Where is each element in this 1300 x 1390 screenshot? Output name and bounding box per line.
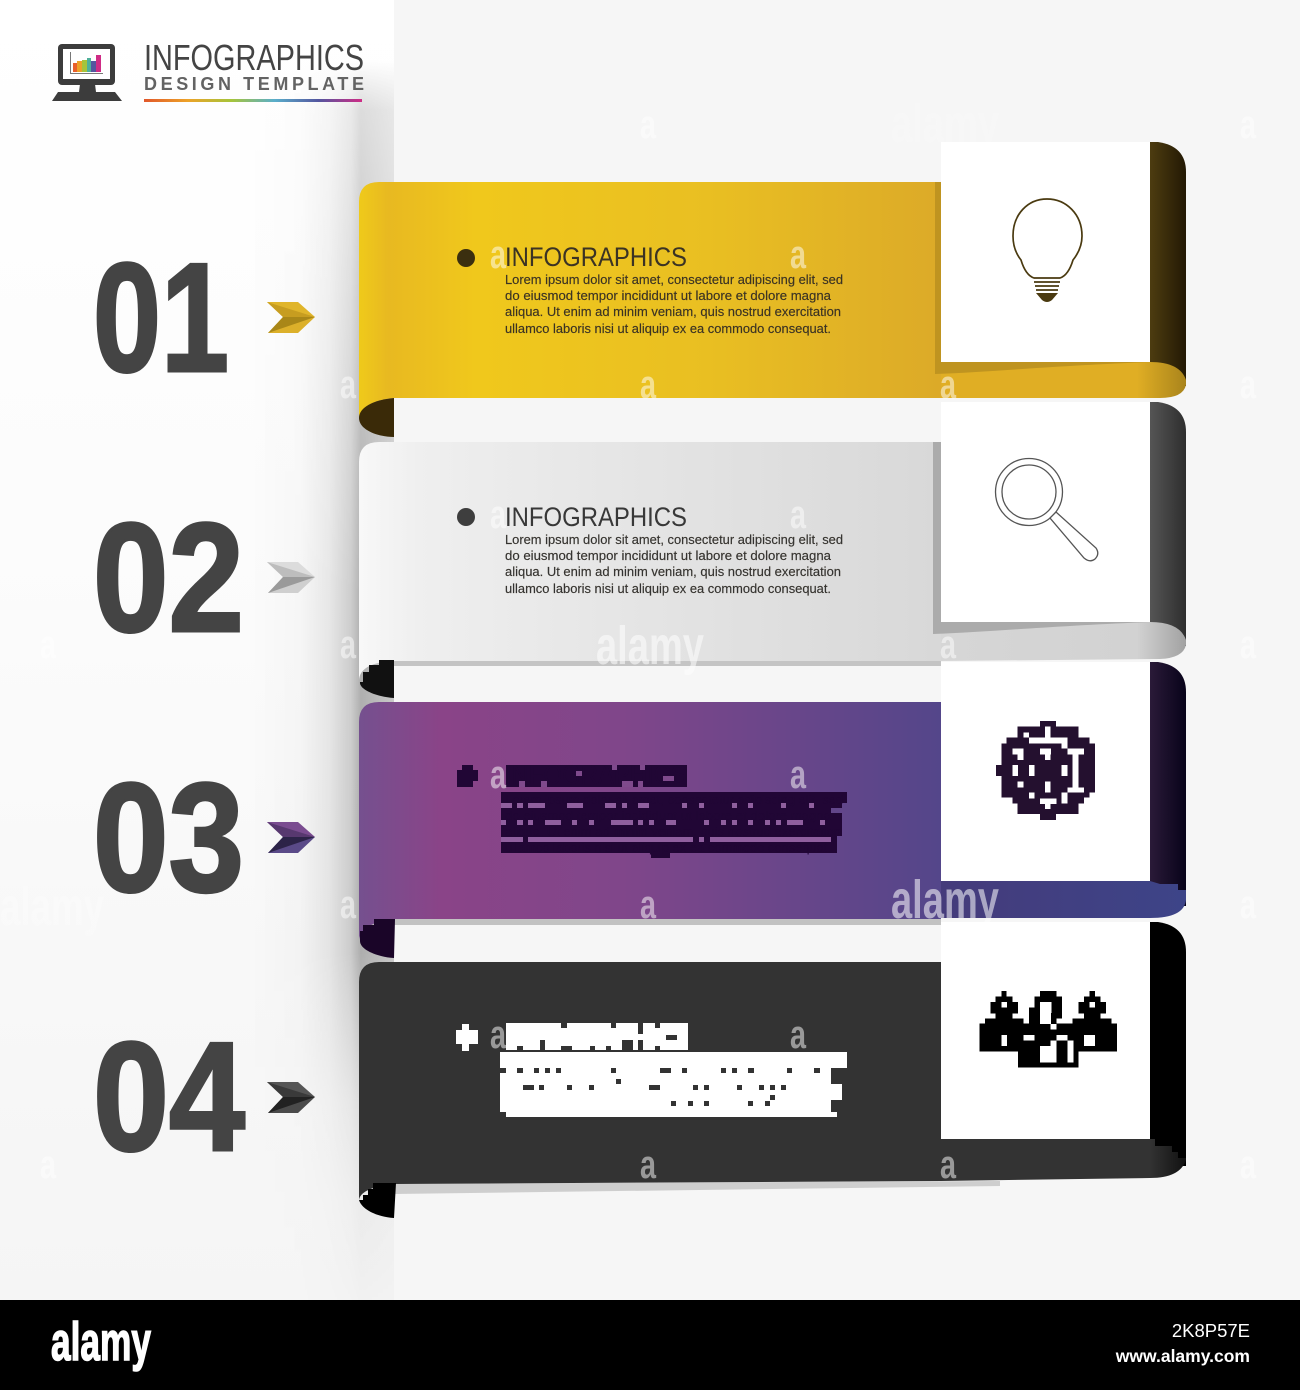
watermark letters: a <box>640 1143 657 1187</box>
watermark letters: a <box>1240 883 1257 927</box>
watermark letters: a <box>340 883 357 927</box>
watermark letters: a <box>340 363 357 407</box>
body text: aliqua. Ut enim ad minim veniam, quis nostrud exercitation <box>505 565 841 579</box>
body text: Lorem ipsum dolor sit amet, consectetur adipiscing elit, sed <box>505 273 843 287</box>
watermark letters: a <box>490 233 507 277</box>
number 02: 02 <box>93 491 244 664</box>
watermark letters: a <box>40 623 57 667</box>
title: infographics: INFOGRAPHICS <box>144 37 364 78</box>
watermark letters: alamy <box>0 877 104 937</box>
watermark letters: a <box>490 1013 507 1057</box>
vertical ribbon shadow <box>307 72 394 1240</box>
watermark letters: a <box>1240 623 1257 667</box>
icon: group of people <box>979 991 1117 1067</box>
rainbow rule <box>144 99 362 102</box>
image id: 2K8P57E <box>1172 1320 1250 1341</box>
watermark letters: a <box>940 623 957 667</box>
body text: ullamco laboris nisi ut aliquip ex ea commodo consequat. <box>505 1101 831 1115</box>
body text <box>505 533 843 596</box>
watermark letters: a <box>490 493 507 537</box>
body text: do eiusmod tempor incididunt ut labore et dolore magna <box>505 289 831 303</box>
panel: ribbon 04 dark <box>359 922 1186 1218</box>
watermark letters: a <box>640 883 657 927</box>
panel: ribbon 03 purple <box>359 662 1186 958</box>
watermark letters: alamy <box>891 94 999 154</box>
heading: INFOGRAPHICS <box>505 242 687 272</box>
body text: aliqua. Ut enim ad minim veniam, quis nostrud exercitation <box>505 305 841 319</box>
icon: light bulb <box>1013 199 1082 302</box>
logo: alamy: alamy <box>51 1312 151 1372</box>
watermark letters: a <box>790 753 807 797</box>
watermark letters: a <box>640 103 657 147</box>
watermark letters: a <box>1240 1143 1257 1187</box>
panel: ribbon 02 grey <box>359 402 1186 698</box>
arrow 02 <box>267 562 315 593</box>
watermark letters: a <box>790 493 807 537</box>
watermark letters: a <box>790 1013 807 1057</box>
heading: INFOGRAPHICS <box>505 760 687 790</box>
body text: aliqua. Ut enim ad minim veniam, quis nostrud exercitation <box>505 1085 841 1099</box>
icon: magnifier <box>996 458 1098 561</box>
bullet <box>457 508 475 526</box>
heading: INFOGRAPHICS <box>505 502 687 532</box>
left side background <box>0 0 394 1300</box>
body text: Lorem ipsum dolor sit amet, consectetur adipiscing elit, sed <box>505 533 843 547</box>
body text: aliqua. Ut enim ad minim veniam, quis nostrud exercitation <box>505 825 841 839</box>
watermark letters: a <box>640 363 657 407</box>
bullet <box>456 1024 478 1051</box>
arrow 04 <box>267 1082 315 1113</box>
arrow 01 <box>267 302 315 333</box>
watermark letters: alamy <box>596 616 704 676</box>
number 01: 01 <box>93 231 229 404</box>
watermark letters <box>0 94 1257 1187</box>
watermark letters: a <box>1240 103 1257 147</box>
body text <box>501 792 847 858</box>
header logo <box>52 37 364 102</box>
icon: globe <box>996 721 1095 820</box>
body text: do eiusmod tempor incididunt ut labore et dolore magna <box>505 1069 831 1083</box>
body text: ullamco laboris nisi ut aliquip ex ea commodo consequat. <box>505 582 831 596</box>
watermark letters: a <box>490 753 507 797</box>
body text <box>500 1052 847 1117</box>
watermark letters: a <box>1240 363 1257 407</box>
body text <box>505 273 843 336</box>
heading: INFOGRAPHICS <box>505 1020 687 1050</box>
body text: Lorem ipsum dolor sit amet, consectetur adipiscing elit, sed <box>505 1053 843 1067</box>
watermark letters: a <box>40 1143 57 1187</box>
body text: ullamco laboris nisi ut aliquip ex ea commodo consequat. <box>505 841 831 855</box>
watermark letters: alamy <box>891 870 999 930</box>
body text: do eiusmod tempor incididunt ut labore et dolore magna <box>505 809 831 823</box>
watermark letters: a <box>940 1143 957 1187</box>
body text: do eiusmod tempor incididunt ut labore et dolore magna <box>505 549 831 563</box>
watermark letters: a <box>940 363 957 407</box>
subtitle: design template: DESIGN TEMPLATE <box>144 74 364 94</box>
bullet <box>457 765 478 787</box>
arrow 03 <box>267 822 315 853</box>
icon: computer monitor with chart <box>52 44 122 101</box>
body text: Lorem ipsum dolor sit amet, consectetur adipiscing elit, sed <box>505 793 843 807</box>
body text: ullamco laboris nisi ut aliquip ex ea commodo consequat. <box>505 322 831 336</box>
watermark letters: a <box>790 233 807 277</box>
bullet <box>457 249 475 267</box>
footer bar <box>0 1300 1300 1390</box>
number 03: 03 <box>93 751 244 924</box>
website: www.alamy.com <box>1115 1346 1250 1366</box>
panel: ribbon 01 yellow <box>359 142 1186 437</box>
number 04: 04 <box>93 1010 245 1183</box>
watermark letters: a <box>340 623 357 667</box>
